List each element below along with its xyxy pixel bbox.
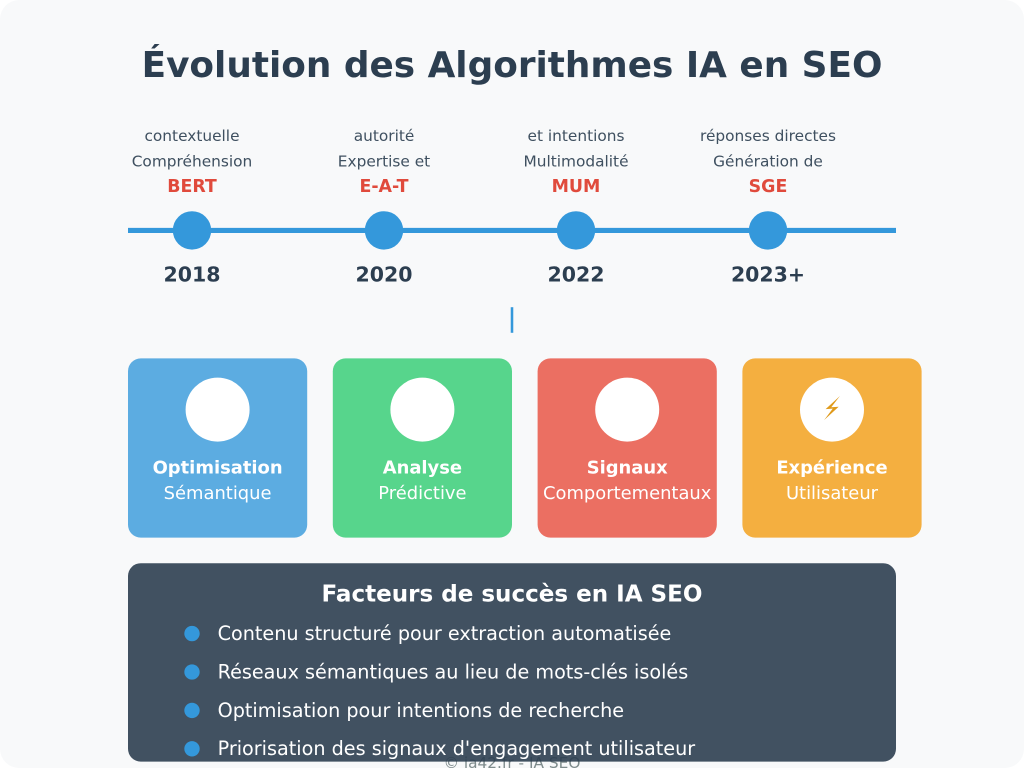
timeline entry: E-A-T 2020 [338, 127, 430, 287]
card: Expérience Utilisateur: Utilisateur [786, 483, 879, 504]
timeline [128, 127, 896, 287]
factor 2: Réseaux sémantiques au lieu de mots-clés isolés [218, 660, 688, 683]
icon: lightning bolt [824, 396, 840, 420]
timeline entry: MUM 2022: 2022 [548, 263, 604, 287]
timeline entry: MUM 2022: et intentions [528, 127, 624, 145]
timeline entry: MUM 2022: MUM [552, 177, 600, 197]
timeline entry: E-A-T 2020: autorité [354, 127, 414, 145]
panel heading: Facteurs de succès en IA SEO [322, 582, 702, 608]
factor 3: Optimisation pour intentions de recherche [218, 699, 624, 722]
timeline axis [128, 228, 896, 232]
card: Optimisation Sémantique: Sémantique [164, 483, 272, 504]
card: Expérience Utilisateur [742, 358, 922, 538]
card: Optimisation Sémantique [128, 358, 307, 538]
card: Analyse Prédictive: Prédictive [378, 483, 467, 504]
timeline entry: E-A-T 2020: 2020 [356, 263, 412, 287]
factor 1: Contenu structuré pour extraction automatisée [218, 622, 671, 645]
timeline entry: MUM 2022: Multimodalité [523, 152, 629, 170]
panel: success factors [128, 563, 896, 762]
connector tick [511, 307, 513, 333]
card: Signaux Comportementaux [538, 358, 717, 538]
card: Signaux Comportementaux: Signaux [587, 458, 668, 479]
timeline entry: BERT 2018: BERT [167, 177, 217, 197]
timeline entry: SGE 2023+: réponses directes [700, 127, 836, 145]
card: Analyse Prédictive [333, 358, 512, 538]
card: Optimisation Sémantique: Optimisation [153, 458, 283, 479]
timeline entry: MUM 2022 [523, 127, 629, 287]
factor 4: Priorisation des signaux d'engagement utilisateur [218, 737, 695, 760]
timeline entry: SGE 2023+: 2023+ [731, 263, 805, 287]
timeline entry: BERT 2018: Compréhension [132, 152, 252, 170]
title: Évolution des Algorithmes IA en SEO [142, 44, 882, 86]
timeline entry: E-A-T 2020: E-A-T [359, 177, 409, 197]
card: Expérience Utilisateur: Expérience [776, 458, 888, 479]
timeline entry: BERT 2018: 2018 [164, 263, 220, 287]
timeline entry: SGE 2023+ [700, 127, 836, 287]
timeline entry: SGE 2023+: SGE [749, 177, 787, 197]
timeline entry: BERT 2018: contextuelle [144, 127, 240, 145]
timeline entry: SGE 2023+: Génération de [713, 152, 823, 170]
timeline entry: E-A-T 2020: Expertise et [338, 152, 430, 170]
card: Signaux Comportementaux: Comportementaux [543, 483, 712, 504]
timeline entry: BERT 2018 [132, 127, 252, 287]
card: Analyse Prédictive: Analyse [383, 458, 462, 479]
